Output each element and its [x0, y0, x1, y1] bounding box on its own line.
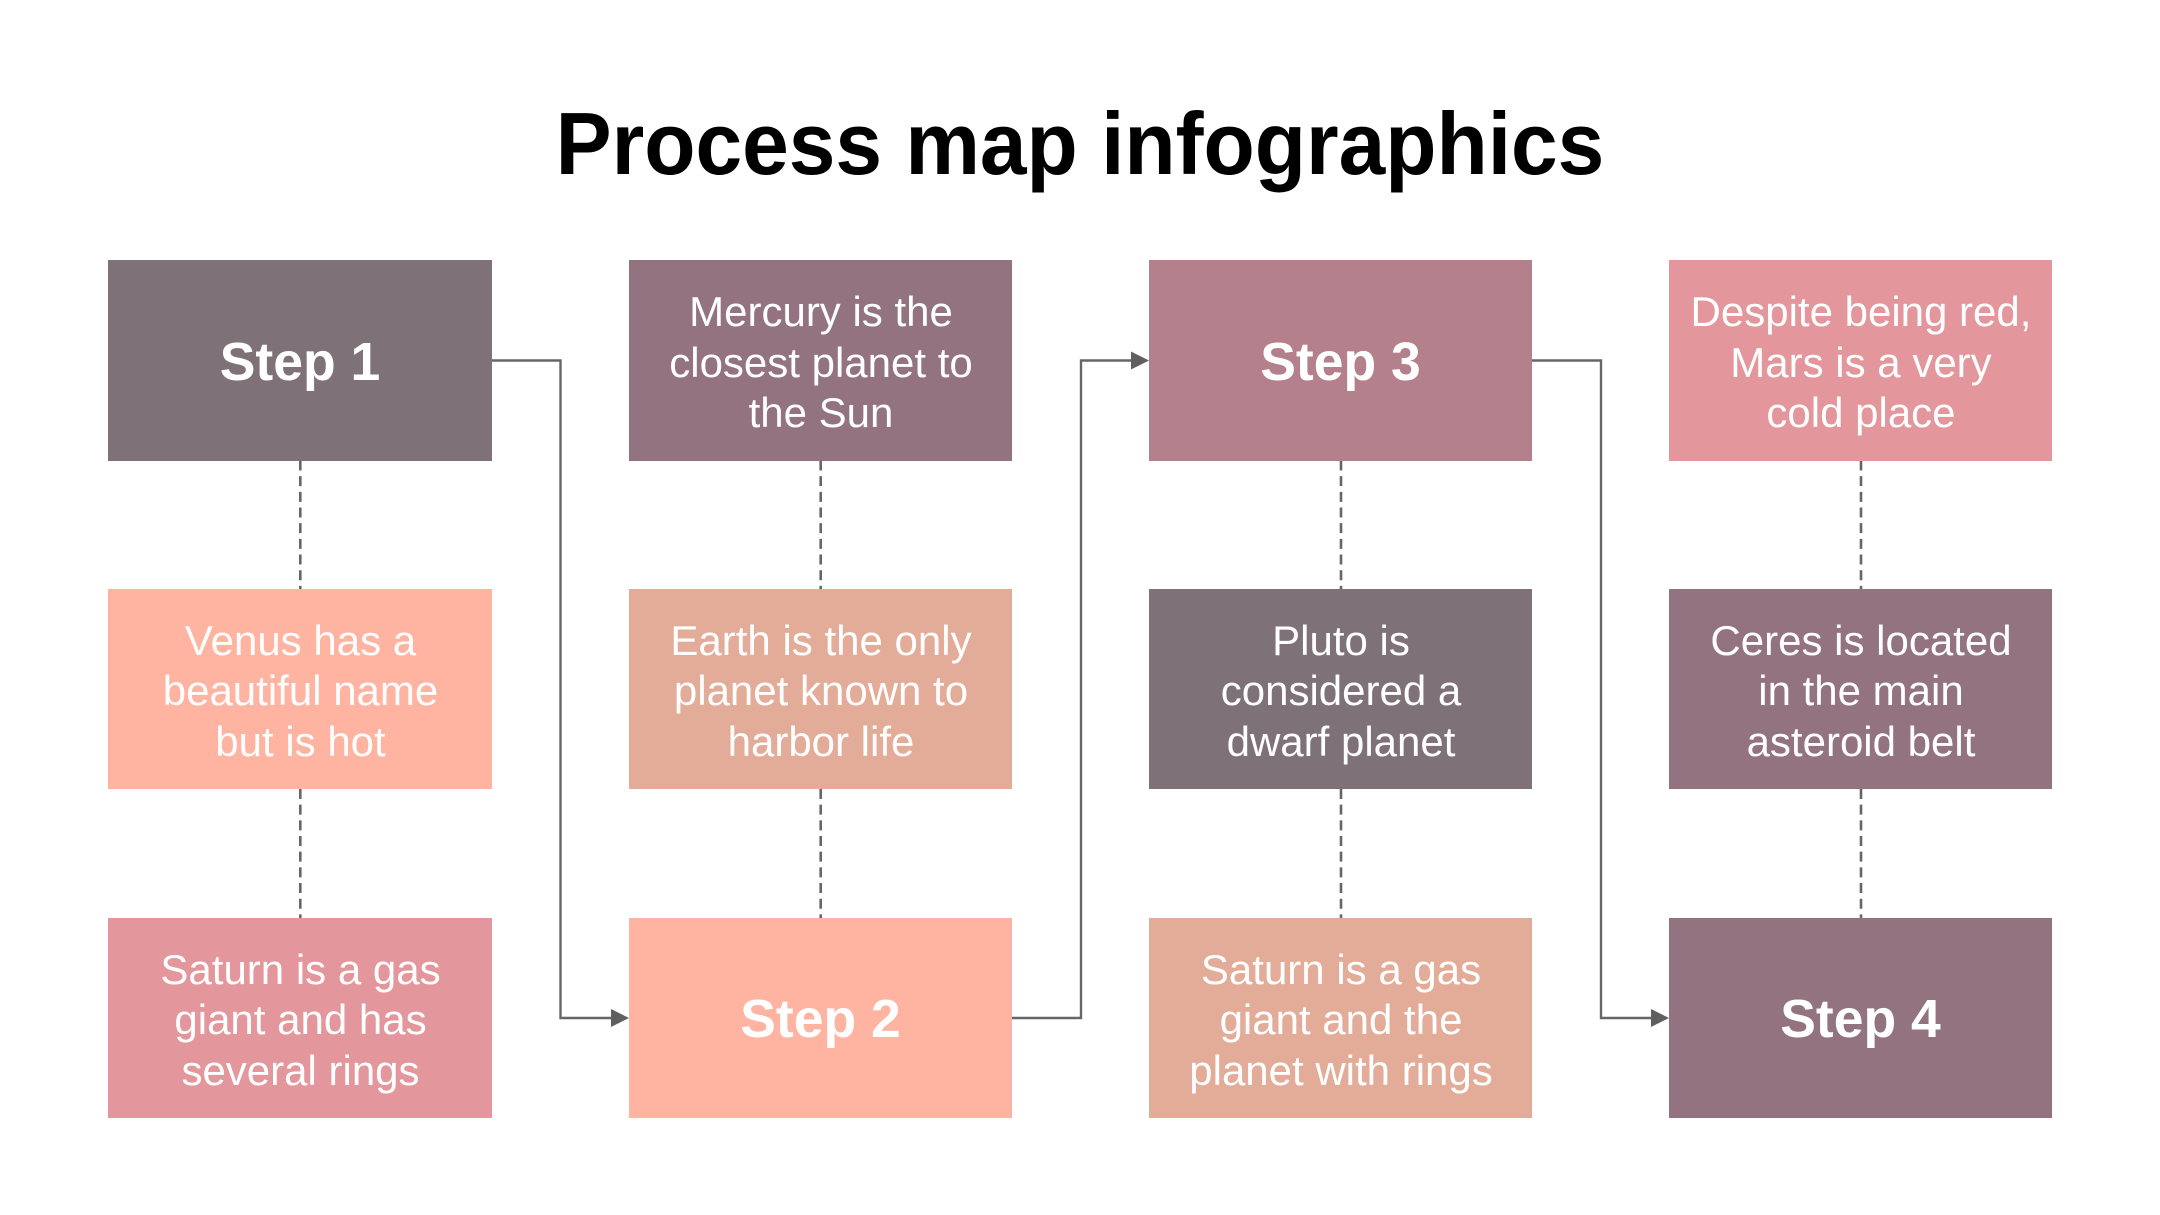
- arrow: step 1 to step 2: [492, 360, 629, 1027]
- Ceres box: in the main: [1758, 667, 1964, 714]
- Venus box: [108, 589, 492, 789]
- title: Process map infographics: [556, 94, 1604, 193]
- dashed links: column 2: [819, 460, 822, 918]
- Earth box: planet known to: [674, 667, 968, 714]
- step 3 box: Step 3: [1260, 332, 1421, 392]
- Earth box: [629, 589, 1012, 789]
- dashed links: column 3: [1340, 460, 1342, 918]
- Saturn box, column 1: several rings: [181, 1047, 420, 1094]
- Mercury box: [629, 260, 1012, 460]
- Mars box: [1669, 260, 2052, 460]
- dashed links: column 1: [299, 460, 302, 918]
- Venus box: but is hot: [215, 718, 386, 765]
- Ceres box: [1669, 589, 2052, 789]
- step 1 box: Step 1: [220, 332, 380, 392]
- Earth box: harbor life: [728, 718, 914, 765]
- Mars box: Mars is a very: [1730, 338, 1992, 386]
- arrow: step 2 to step 3: [1012, 352, 1149, 1018]
- Earth box: Earth is the only: [670, 617, 972, 664]
- step 2 box: Step 2: [740, 990, 901, 1049]
- Venus box: Venus has a: [185, 617, 416, 664]
- dashed links: column 4: [1860, 460, 1862, 918]
- step 4 box: Step 4: [1780, 990, 1941, 1049]
- Pluto box: considered a: [1221, 667, 1461, 714]
- Ceres box: asteroid belt: [1747, 718, 1975, 765]
- step 2 box: [629, 918, 1012, 1118]
- Ceres box: Ceres is located: [1710, 617, 2012, 664]
- Mercury box: the Sun: [749, 389, 893, 436]
- Mercury box: closest planet to: [669, 338, 973, 386]
- Mercury box: Mercury is the: [689, 288, 953, 335]
- Venus box: beautiful name: [163, 667, 438, 714]
- Saturn box, column 1: [108, 918, 492, 1118]
- Pluto box: [1149, 589, 1532, 789]
- Saturn box, column 3: planet with rings: [1189, 1047, 1493, 1094]
- step 4 box: [1669, 918, 2052, 1118]
- Saturn box, column 1: giant and has: [174, 996, 427, 1043]
- arrow: step 3 to step 4: [1532, 360, 1669, 1027]
- Saturn box, column 3: Saturn is a gas: [1201, 946, 1481, 993]
- Saturn box, column 3: [1149, 918, 1532, 1118]
- Saturn box, column 1: Saturn is a gas: [160, 946, 441, 993]
- Mars box: Despite being red,: [1691, 288, 2031, 335]
- Pluto box: Pluto is: [1272, 617, 1410, 664]
- Saturn box, column 3: giant and the: [1220, 996, 1462, 1043]
- step 1 box: [108, 260, 492, 460]
- step 3 box: [1149, 260, 1532, 460]
- Pluto box: dwarf planet: [1227, 718, 1455, 765]
- Mars box: cold place: [1766, 389, 1956, 436]
